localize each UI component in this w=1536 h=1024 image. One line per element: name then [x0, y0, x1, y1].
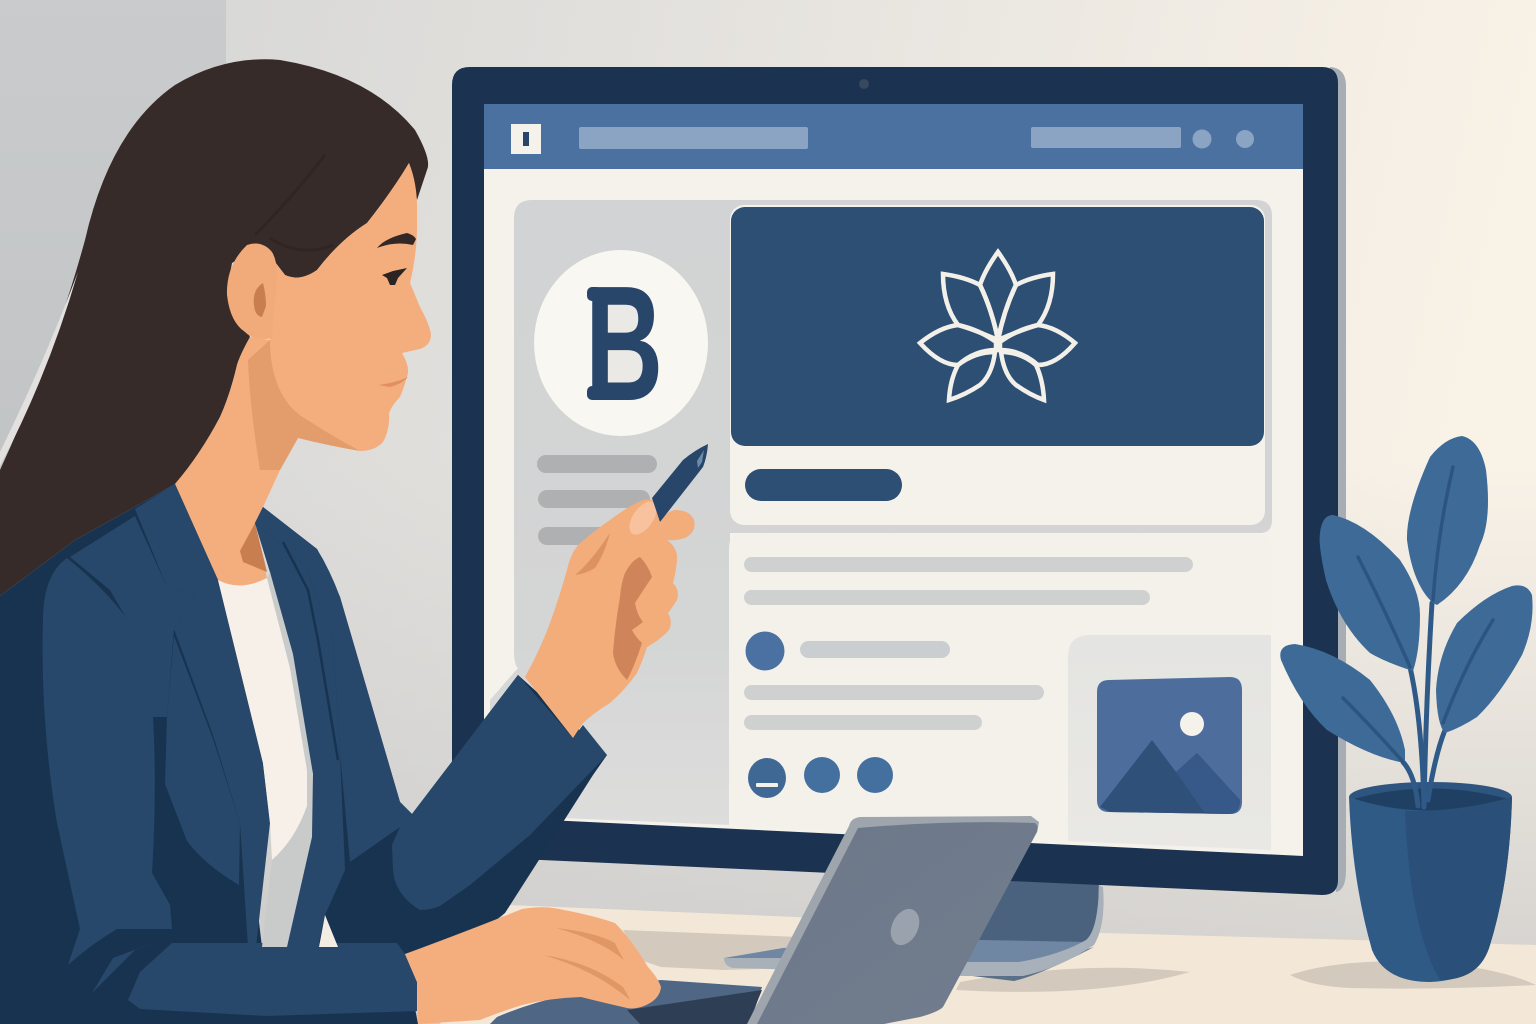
banner	[731, 207, 1264, 446]
lower content card	[729, 534, 1271, 852]
action button minus	[748, 758, 786, 798]
shirt	[218, 578, 307, 860]
image thumbnail	[1097, 677, 1242, 814]
sleeve wedge	[92, 936, 172, 993]
eye	[382, 268, 407, 285]
header dot 2	[1236, 130, 1254, 148]
shirt lower sliver	[319, 915, 338, 947]
lapel fold right	[283, 542, 338, 760]
thumb nail	[624, 497, 662, 539]
sidebar line 1	[537, 455, 657, 473]
monitor stand	[724, 880, 1104, 981]
browser header	[484, 104, 1303, 169]
person	[0, 59, 708, 1024]
letter B logo: B	[585, 252, 663, 435]
shoulder panel	[70, 516, 195, 717]
lower sleeve	[128, 943, 417, 1016]
hair	[0, 59, 428, 596]
monitor bezel	[452, 67, 1338, 895]
sidebar line 3	[538, 527, 628, 545]
pot back and inside	[1349, 782, 1512, 812]
hair light streak	[0, 272, 78, 466]
inner right front	[255, 523, 345, 947]
monitor	[452, 67, 1346, 895]
image card	[1068, 635, 1271, 850]
avatar circle	[534, 250, 708, 436]
blazer	[0, 484, 607, 1024]
lips	[378, 377, 408, 387]
monitor side edge	[1330, 67, 1346, 892]
text line 4	[744, 715, 982, 730]
plant	[1280, 436, 1533, 982]
keyboard deck	[490, 980, 762, 1024]
search bar	[1031, 127, 1181, 148]
neck	[175, 337, 298, 586]
logo square	[511, 124, 541, 154]
raised hand	[525, 497, 695, 738]
ear	[227, 244, 277, 339]
face	[262, 163, 431, 451]
stylus pen	[652, 444, 708, 522]
laptop logo	[885, 904, 925, 950]
laptop	[490, 816, 1039, 1024]
keys	[627, 990, 762, 1024]
lid edge	[747, 816, 1039, 1024]
eyebrow	[377, 233, 416, 248]
upper sleeve panel	[43, 558, 172, 965]
neck shadow	[248, 340, 360, 470]
pot	[1349, 797, 1512, 982]
text line 3	[744, 685, 1044, 700]
button	[745, 469, 902, 501]
pot shaded side	[1405, 797, 1512, 980]
address bar	[579, 127, 808, 149]
forearm	[392, 675, 607, 910]
lotus logo	[920, 252, 1075, 400]
screen	[484, 104, 1303, 856]
ear inner	[254, 283, 266, 317]
hair strands	[255, 155, 333, 250]
author name line	[800, 641, 950, 658]
text line 1	[744, 557, 1193, 572]
front panel	[165, 636, 240, 885]
author avatar	[746, 632, 784, 670]
knuckle crease	[575, 533, 610, 575]
laptop lid	[757, 822, 1038, 1024]
header dot 1	[1192, 130, 1212, 148]
stems	[1403, 603, 1445, 807]
action button 3	[857, 757, 893, 793]
sidebar line 2	[538, 490, 650, 508]
action button 2	[804, 757, 840, 793]
shirt shadow	[262, 572, 313, 947]
leaf veins	[1343, 467, 1493, 762]
desk	[440, 905, 1536, 1024]
collar shadow	[240, 523, 267, 572]
webcam	[859, 79, 869, 89]
leaves	[1280, 436, 1533, 763]
text line 2	[744, 590, 1150, 605]
lapel left	[135, 484, 270, 947]
blazer dark base	[0, 484, 607, 1024]
typing hand	[405, 907, 661, 1024]
palm shadow	[613, 557, 652, 680]
sidebar panel	[490, 200, 1272, 825]
top brand card	[730, 205, 1265, 525]
right front panel	[255, 507, 412, 862]
